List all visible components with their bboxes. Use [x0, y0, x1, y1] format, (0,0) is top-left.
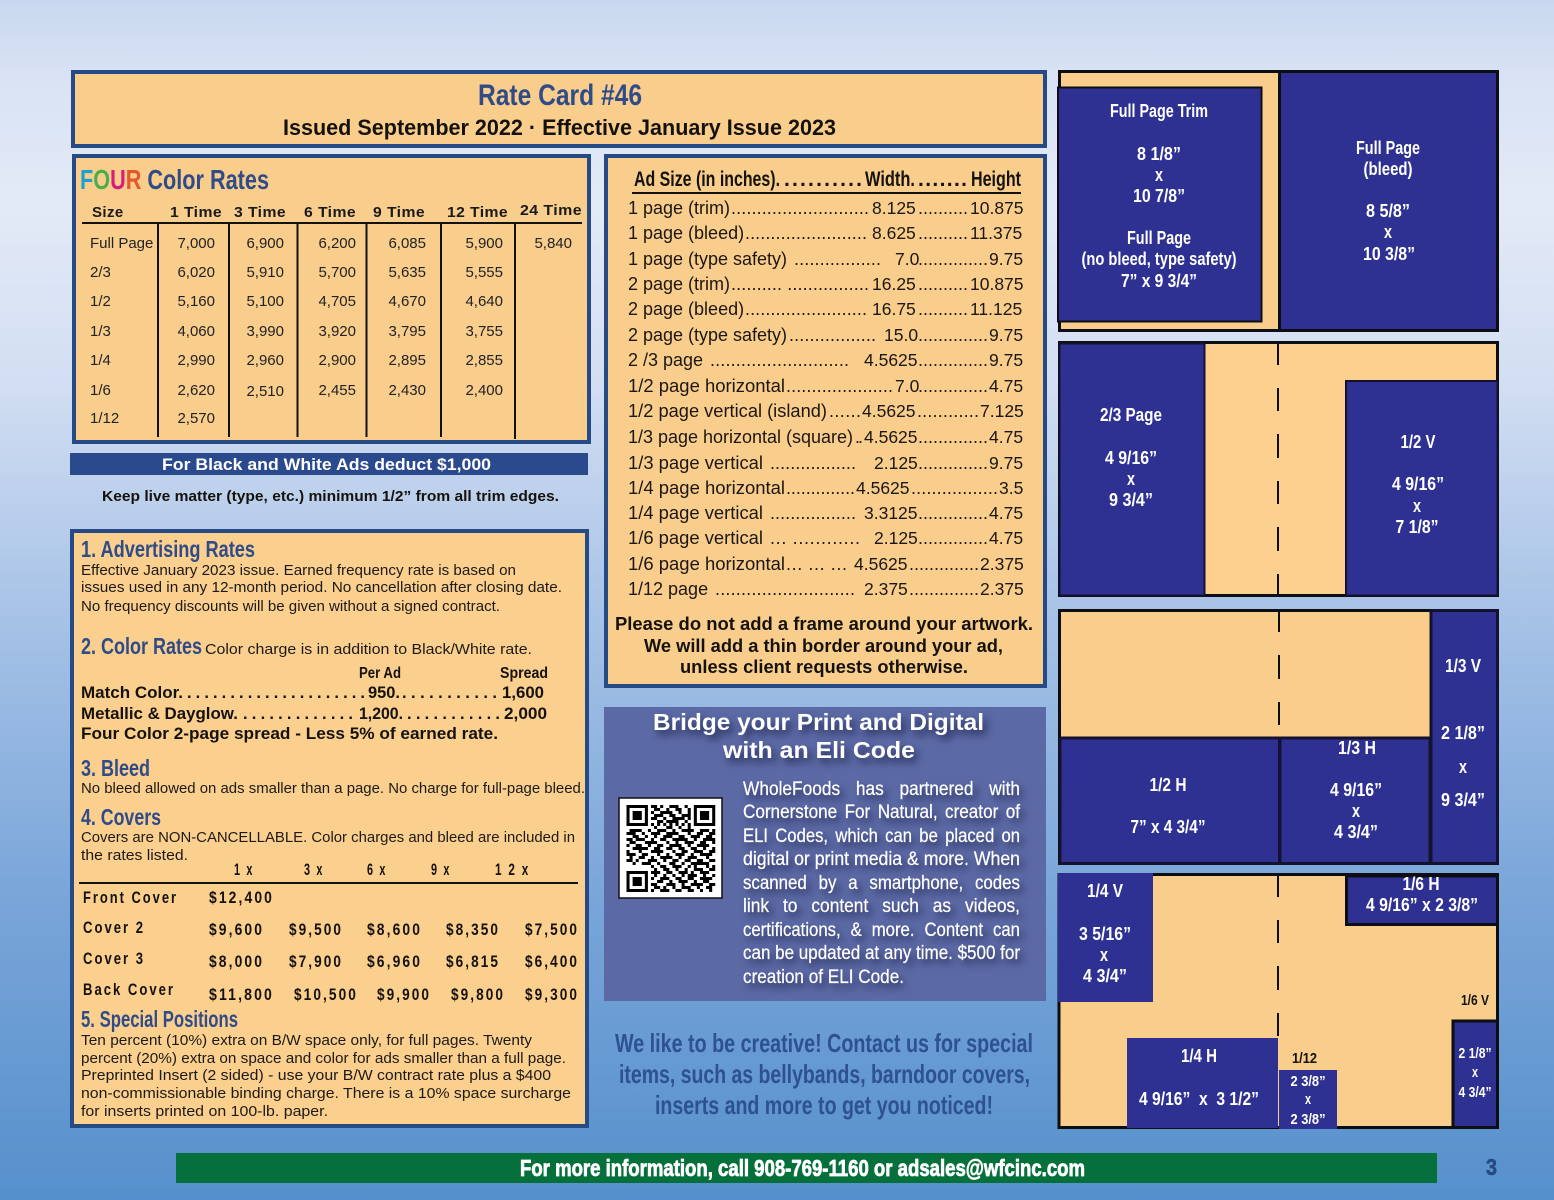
one-twelfth label: 1/12: [1292, 1051, 1317, 1067]
black and white deduction bar: For Black and White Ads deduct $1,000: [162, 455, 491, 474]
full page trim box: x: [1155, 165, 1163, 185]
ad size table rows: 1/4 page horizontal: [628, 478, 785, 498]
rate table rows: 3,755: [465, 323, 503, 340]
covers table: $6,815: [446, 953, 500, 971]
creative contact callout: [615, 1028, 1033, 1120]
section 2: color rates: Spread: [500, 665, 548, 682]
covers table: $8,350: [446, 921, 500, 939]
eli code description: scanned by a smartphone, codes: [743, 873, 1020, 894]
artwork frame note: [615, 614, 1033, 677]
covers table: Cover 3: [83, 950, 145, 968]
rate table rows: 1/4: [90, 352, 111, 369]
one-quarter horizontal box: 1/4 H: [1181, 1046, 1217, 1066]
section 4: covers: the rates listed.: [81, 847, 188, 864]
rate table header: 3 Time: [234, 204, 286, 221]
ad size table rows: .................: [789, 325, 876, 345]
rate table rows: 5,635: [388, 264, 426, 281]
ad size table rows: 3.3125: [864, 503, 918, 523]
full page bleed box: Full Page: [1356, 138, 1420, 158]
rate table rows: 1/3: [90, 323, 111, 340]
ad size table rows: 9.75: [989, 325, 1023, 345]
full page bleed box: 8 5/8”: [1366, 201, 1410, 221]
rate table rows: 6,085: [388, 235, 426, 252]
ad size table rows: 8.625: [872, 223, 916, 243]
covers table: $12,400: [209, 889, 274, 907]
rate table rows: 4,670: [388, 293, 426, 310]
ad size table rows: ...........................: [715, 579, 855, 599]
section 2: color rates: 2. Color Rates: [81, 633, 202, 659]
section 1: advertising rates: No frequency discounts will be given without a signed contract.: [81, 598, 500, 615]
covers table: 1 2 x: [495, 861, 530, 879]
rate table rows: 5,900: [465, 235, 503, 252]
covers table: $9,600: [209, 921, 264, 939]
full page bleed box: [1280, 72, 1498, 330]
ad size table rows: 2.125: [874, 528, 918, 548]
half horizontal box: 1/2 H: [1150, 775, 1186, 795]
section 2: color rates: 1,200.: [359, 705, 403, 723]
ad size table rows: 3.5: [999, 478, 1023, 498]
ad size table rows: 2 /3 page: [628, 350, 703, 370]
ad size table rows: 7.0: [895, 249, 920, 269]
covers table: $9,300: [525, 986, 579, 1004]
rate table rows: 2,620: [177, 382, 215, 399]
ad size table rows: 1 page (type safety): [628, 249, 787, 269]
section 3: bleed: No bleed allowed on ads smaller than a page. No charge for full-page bleed.: [81, 780, 585, 797]
one-twelfth box: 2 3/8”: [1290, 1074, 1326, 1090]
ad size table rows: 1/3 page horizontal (square): [628, 427, 853, 447]
one-quarter vertical box: [1058, 873, 1153, 1002]
ad size table rows: ...........................: [731, 198, 869, 218]
ad size table rows: .................: [770, 453, 856, 473]
rate table rows: 3,795: [388, 323, 426, 340]
covers table: $7,500: [525, 921, 579, 939]
rate table header: [92, 202, 582, 221]
issue date subtitle: Issued September 2022 · Effective January Issue 2023: [283, 115, 836, 140]
rate table rows: 2,455: [318, 382, 356, 399]
eli code description: Cornerstone For Natural, creator of: [743, 802, 1021, 823]
full page bleed box: x: [1384, 222, 1392, 242]
ad size table header: Height: [971, 168, 1021, 191]
creative contact callout: We like to be creative! Contact us for special: [615, 1028, 1033, 1058]
rate table rows: 5,840: [534, 235, 572, 252]
ad size table rows: 7.0: [895, 376, 920, 396]
section 5: special positions: for inserts printed on 100-lb. paper.: [81, 1103, 328, 1120]
rate table rows: 3,920: [318, 323, 356, 340]
section 2: color rates: Match Color.: [81, 684, 183, 702]
section 2: color rates: 950.: [368, 684, 400, 702]
ad size table rows: ..............: [918, 528, 988, 548]
covers table: 6 x: [367, 861, 387, 879]
one-third horizontal box: [1280, 738, 1430, 864]
ad size table rows: .....................: [786, 376, 893, 396]
ad size table header: [632, 168, 1021, 194]
two-thirds page box: 9 3/4”: [1109, 490, 1153, 510]
diagram: quarters, sixths and twelfth: [1058, 873, 1498, 1129]
ad size table rows: ......: [829, 401, 861, 421]
rate table rows: 5,910: [246, 264, 284, 281]
ad size table rows: 4.5625: [854, 554, 908, 574]
one-quarter vertical box: 4 3/4”: [1083, 966, 1127, 986]
full page trim box: Full Page: [1127, 228, 1191, 248]
covers table: Back Cover: [83, 981, 175, 999]
covers table: 3 x: [304, 861, 324, 879]
eli code heading: with an Eli Code: [722, 737, 915, 763]
ad size table rows: 1 page (bleed): [628, 223, 744, 243]
one-third vertical box: 9 3/4”: [1441, 790, 1485, 810]
ad size table rows: ..............: [786, 478, 855, 498]
eli code description: certifications, & more. Content can: [743, 920, 1020, 941]
section 4: covers: [79, 804, 579, 1004]
ad size table rows: ..........: [918, 299, 968, 319]
ad size table rows: .................: [911, 478, 998, 498]
rate table rows: 5,555: [465, 264, 503, 281]
section 5: special positions: non-commissionable binding charge. There is a 10% space surcharge: [81, 1085, 571, 1102]
ad size table rows: 1/4 page vertical: [628, 503, 763, 523]
ad size table rows: 4.75: [989, 503, 1023, 523]
ad size table rows: 2 page (type safety): [628, 325, 787, 345]
ad size table rows: 1/2 page horizontal: [628, 376, 785, 396]
rate table rows: 4,705: [318, 293, 356, 310]
section 5: special positions: Ten percent (10%) extra on B/W space only, for full pages. Twenty: [81, 1032, 533, 1049]
ad size table rows: 4.5625: [862, 401, 916, 421]
ad size table rows: ..............: [909, 554, 979, 574]
eli code description: ELI Codes, which can be placed on: [743, 826, 1020, 847]
ad size table rows: 1/2 page vertical (island): [628, 401, 827, 421]
covers table: 1 x: [234, 861, 254, 879]
full page bleed box: 10 3/8”: [1363, 244, 1415, 264]
section 2: color rates: Color charge is in addition to Black/White rate.: [205, 641, 532, 658]
artwork frame note: We will add a thin border around your ad,: [644, 636, 1003, 656]
covers table: $7,900: [289, 953, 343, 971]
ad size table rows: .................: [770, 503, 856, 523]
half horizontal box: [1060, 738, 1280, 864]
one-sixth horizontal box: 4 9/16” x 2 3/8”: [1366, 895, 1478, 915]
one-twelfth box: x: [1305, 1092, 1311, 1108]
eli code description: WholeFoods has partnered with: [743, 779, 1020, 800]
ad size table rows: 10.875: [970, 274, 1024, 294]
ad size table rows: ...........................: [710, 350, 849, 370]
section 2: color rates: . . . . . . . . . . . . .: [243, 705, 353, 723]
eli code description: digital or print media & more. When: [743, 849, 1020, 870]
panel: ad sizes: [606, 156, 1045, 686]
rate table rows: Full Page: [90, 235, 153, 252]
ad size table rows: 15.0: [884, 325, 918, 345]
ad size table rows: 2.125: [874, 453, 918, 473]
one-third horizontal box: 1/3 H: [1338, 738, 1376, 758]
rate table rows: [90, 235, 572, 427]
one-quarter vertical box: x: [1100, 945, 1108, 965]
ad size table rows: 1/6 page horizontal: [628, 554, 785, 574]
ad size table rows: ........................: [745, 299, 867, 319]
section 1: advertising rates: [81, 536, 562, 615]
ad size table rows: 2.375: [980, 554, 1024, 574]
artwork frame note: unless client requests otherwise.: [680, 657, 968, 677]
ad size table rows: 9.75: [989, 350, 1023, 370]
diagram: two-thirds and half vertical: [1060, 342, 1498, 596]
section 1: advertising rates: issues used in any 12-month period. No cancellation after closing date.: [81, 579, 562, 596]
half vertical box: 1/2 V: [1400, 432, 1436, 452]
one-third horizontal box: 4 3/4”: [1334, 822, 1378, 842]
one-sixth vertical box: x: [1472, 1065, 1478, 1081]
section 1: advertising rates: Effective January 2023 issue. Earned frequency rate is based on: [81, 562, 516, 579]
one-quarter vertical box: 1/4 V: [1087, 881, 1123, 901]
covers table: Front Cover: [83, 889, 178, 907]
one-sixth vertical box: [1453, 1021, 1498, 1128]
ad size table rows: ..............: [918, 249, 988, 269]
panel: terms and conditions: [72, 531, 587, 1126]
diagram: full page sizes: [1058, 72, 1498, 330]
rate table header: 24 Time: [520, 202, 582, 219]
half vertical box: x: [1413, 496, 1421, 516]
one-third vertical box: 1/3 V: [1445, 656, 1481, 676]
full page trim box: Full Page Trim: [1110, 101, 1208, 121]
ad size table header: . . . . . . .: [918, 168, 967, 191]
one-sixth vertical label: 1/6 V: [1461, 993, 1489, 1009]
covers table: [79, 861, 579, 1004]
half vertical box: 7 1/8”: [1396, 517, 1438, 537]
ad size table rows: ........................: [745, 223, 867, 243]
rate table rows: 2,990: [177, 352, 215, 369]
one-quarter horizontal box: [1127, 1038, 1278, 1128]
ad size table rows: ..............: [918, 350, 988, 370]
rate table rows: 7,000: [177, 235, 215, 252]
ad size table header: Ad Size (in inches).: [634, 168, 780, 191]
covers table: $9,800: [451, 986, 505, 1004]
covers table: $8,000: [209, 953, 264, 971]
ad size table rows: 9.75: [989, 249, 1023, 269]
section 3: bleed: 3. Bleed: [81, 755, 150, 781]
covers table: $11,800: [209, 986, 274, 1004]
covers table: $9,900: [377, 986, 431, 1004]
section 5: special positions: [81, 1006, 571, 1120]
rate table rows: 1/6: [90, 382, 111, 399]
rate table rows: 2,895: [388, 352, 426, 369]
ad size table rows: ..............: [918, 503, 988, 523]
section 2: color rates: . . . . . . . . . . .: [407, 705, 500, 723]
ad size table rows: ..............: [918, 453, 988, 473]
section 2: color rates: [81, 633, 548, 743]
ad size table rows: 2.375: [980, 579, 1024, 599]
ad size table rows: 1/12 page: [628, 579, 708, 599]
ad size table rows: 7.125: [980, 401, 1024, 421]
one-third horizontal box: 4 9/16”: [1330, 780, 1382, 800]
ad size table rows: 4.5625: [856, 478, 910, 498]
page number: 3: [1486, 1154, 1497, 1180]
section 2: color rates: Metallic & Dayglow.: [81, 705, 238, 723]
ad size table rows: [628, 198, 1024, 599]
footer contact bar: [176, 1153, 1437, 1183]
rate table rows: 2,900: [318, 352, 356, 369]
live matter note: Keep live matter (type, etc.) minimum 1/2” from all trim edges.: [102, 488, 559, 505]
section 5: special positions: percent (20%) extra on space and color for ads smaller than a full page.: [81, 1050, 566, 1067]
rate table rows: 2,960: [246, 352, 284, 369]
two-thirds page box: 2/3 Page: [1100, 405, 1162, 425]
section 2: color rates: 2,000: [504, 705, 547, 723]
half vertical box: 4 9/16”: [1392, 474, 1444, 494]
rate table rows: 3,990: [246, 323, 284, 340]
rate table header: 6 Time: [304, 204, 356, 221]
ad size table rows: 9.75: [989, 453, 1023, 473]
rate table rows: 2/3: [90, 264, 111, 281]
covers table: $6,400: [525, 953, 579, 971]
one-third vertical box: [1431, 610, 1498, 864]
ad size table rows: 10.875: [970, 198, 1024, 218]
ad size table header: . . . . . . . . . .: [784, 168, 862, 191]
one-third vertical box: 2 1/8”: [1441, 723, 1485, 743]
diagram: halves and thirds: [1060, 610, 1498, 864]
rate table rows: 1/12: [90, 410, 119, 427]
rate table rows: 2,400: [465, 382, 503, 399]
eli code heading: [653, 709, 984, 763]
ad size table rows: 16.75: [872, 299, 916, 319]
covers table: $10,500: [294, 986, 358, 1004]
section 2: color rates: . . . . . . . . . . .: [402, 684, 497, 702]
section 5: special positions: 5. Special Positions: [81, 1006, 238, 1032]
ad size table rows: ..........: [918, 223, 968, 243]
rate table rows: 5,160: [177, 293, 215, 310]
ad size table rows: .......... ................: [731, 274, 869, 294]
one-third horizontal box: x: [1352, 801, 1360, 821]
creative contact callout: items, such as bellybands, barndoor covers,: [619, 1059, 1030, 1089]
covers table: 9 x: [431, 861, 451, 879]
rate table rows: 2,430: [388, 382, 426, 399]
one-twelfth box: [1279, 1070, 1337, 1129]
two-thirds page box: 4 9/16”: [1105, 448, 1157, 468]
half vertical box: [1346, 381, 1498, 596]
ad size table rows: 1/6 page vertical: [628, 528, 763, 548]
one-sixth horizontal box: 1/6 H: [1402, 874, 1440, 894]
panel: four color rates: [74, 156, 589, 442]
rate table rows: 1/2: [90, 293, 111, 310]
one-twelfth box: 2 3/8”: [1290, 1112, 1326, 1128]
section 5: special positions: Preprinted Insert (2 sided) - use your B/W contract rate plus a $400: [81, 1067, 551, 1084]
ad size table rows: ... ... ...: [786, 554, 847, 574]
ad size table rows: ..........: [918, 274, 968, 294]
full page trim box: 8 1/8”: [1137, 144, 1181, 164]
covers table: $9,500: [289, 921, 343, 939]
ad size table rows: 11.125: [970, 299, 1022, 319]
full page bleed box: (bleed): [1364, 159, 1412, 179]
ad size table rows: 2 page (bleed): [628, 299, 744, 319]
ad size table rows: ..............: [918, 427, 988, 447]
ad size table rows: 4.75: [989, 427, 1023, 447]
section 2: color rates: 1,600: [502, 684, 544, 702]
ad size table rows: 4.75: [989, 528, 1023, 548]
one-quarter vertical box: 3 5/16”: [1079, 924, 1131, 944]
ad size table rows: ..............: [909, 579, 979, 599]
panel: rate card header: [73, 72, 1045, 146]
ad size table rows: ... ............: [770, 528, 860, 548]
ad size table rows: ............: [917, 401, 979, 421]
creative contact callout: inserts and more to get you noticed!: [655, 1090, 993, 1120]
rate table header: 12 Time: [447, 204, 508, 221]
rate table header: 9 Time: [373, 204, 425, 221]
panel: eli code promo: [604, 707, 1046, 1001]
two-thirds page box: [1060, 344, 1204, 596]
one-sixth horizontal box: [1346, 874, 1498, 924]
eli code description: [743, 779, 1021, 988]
eli code description: can be updated at any time. $500 for: [743, 943, 1021, 964]
ad size table rows: 4.75: [989, 376, 1023, 396]
ad size table rows: 2 page (trim): [628, 274, 730, 294]
ad size table rows: ..............: [918, 376, 988, 396]
ad size table rows: 8.125: [872, 198, 916, 218]
full page trim box: [1058, 88, 1262, 322]
one-quarter horizontal box: 4 9/16” x 3 1/2”: [1139, 1089, 1259, 1109]
covers table: $8,600: [367, 921, 422, 939]
one-sixth vertical box: 4 3/4”: [1458, 1085, 1492, 1101]
rate table rows: 6,200: [318, 235, 356, 252]
rate table rows: 2,510: [246, 383, 284, 400]
ad size table rows: 2.375: [864, 579, 908, 599]
section 2: color rates: . . . . . . . . . . . . . . . . . . . . .: [187, 684, 365, 702]
ad size table rows: 16.25: [872, 274, 916, 294]
section 2: color rates: Four Color 2-page spread - Less 5% of earned rate.: [81, 725, 498, 743]
one-third vertical box: x: [1459, 757, 1467, 777]
half horizontal box: 7” x 4 3/4”: [1130, 817, 1206, 837]
section 1: advertising rates: 1. Advertising Rates: [81, 536, 255, 562]
rate table header: Size: [92, 204, 124, 221]
ad size table rows: .................: [794, 249, 881, 269]
rate table rows: 5,700: [318, 264, 356, 281]
rate table rows: 4,640: [465, 293, 503, 310]
one-sixth vertical box: 2 1/8”: [1458, 1046, 1492, 1062]
title: Rate Card #46: [478, 79, 642, 112]
full page trim box: 7” x 9 3/4”: [1121, 271, 1197, 291]
icon: qr code: [619, 798, 722, 898]
ad size table rows: ..........: [918, 198, 968, 218]
section 4: covers: Covers are NON-CANCELLABLE. Color charges and bleed are included in: [81, 829, 575, 846]
rate table rows: 2,570: [177, 410, 215, 427]
rate table rows: 6,020: [177, 264, 215, 281]
ad size table rows: ..............: [918, 325, 988, 345]
covers table: Cover 2: [83, 919, 145, 937]
ad size table rows: 11.375: [970, 223, 1022, 243]
ad size table header: Width.: [865, 168, 915, 191]
full page trim box: 10 7/8”: [1133, 186, 1185, 206]
ad size table rows: 4.5625: [864, 427, 918, 447]
ad size table rows: 1 page (trim): [628, 198, 730, 218]
ad size table rows: 1/3 page vertical: [628, 453, 763, 473]
eli code description: creation of ELI Code.: [743, 967, 904, 988]
covers table: $6,960: [367, 953, 422, 971]
rate table header: 1 Time: [170, 204, 222, 221]
eli code heading: Bridge your Print and Digital: [653, 709, 984, 735]
ad size table rows: ..: [855, 427, 863, 447]
full page trim box: (no bleed, type safety): [1082, 249, 1236, 269]
artwork frame note: Please do not add a frame around your artwork.: [615, 614, 1033, 634]
eli code description: link to content such as videos,: [743, 896, 1020, 917]
ad size table rows: 4.5625: [864, 350, 918, 370]
footer contact bar: For more information, call 908-769-1160 or adsales@wfcinc.com: [520, 1155, 1085, 1181]
section 2: color rates: Per Ad: [359, 665, 401, 682]
rate table rows: 4,060: [177, 323, 215, 340]
rate table rows: 6,900: [246, 235, 284, 252]
two-thirds page box: x: [1127, 469, 1135, 489]
rate table rows: 2,855: [465, 352, 503, 369]
heading: four color rates: FOUR Color Rates: [80, 164, 269, 195]
section 3: bleed: [81, 755, 585, 797]
rate table rows: 5,100: [246, 293, 284, 310]
section 4: covers: 4. Covers: [81, 804, 161, 830]
black and white deduction bar: [70, 453, 588, 475]
